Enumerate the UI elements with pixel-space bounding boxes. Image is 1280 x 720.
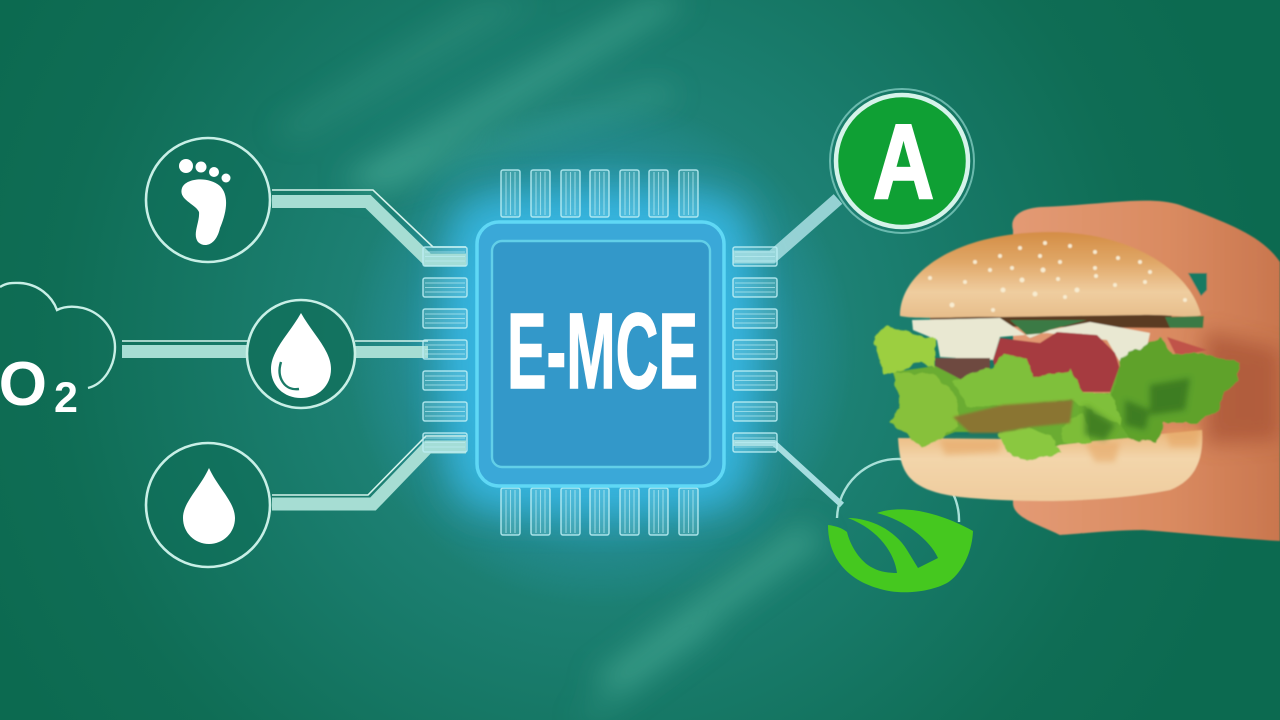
icon: CO2 cloud: 2 <box>54 374 78 422</box>
chip body <box>477 222 724 486</box>
hand <box>1012 201 1280 541</box>
shaded palm <box>1205 330 1280 445</box>
icon: green leaf with ring <box>828 459 973 592</box>
badge: grade A: A <box>873 103 934 221</box>
connector: chip to leaf <box>733 443 842 505</box>
badge: grade A <box>830 89 974 233</box>
burger in hand <box>874 201 1280 541</box>
sesame seeds <box>928 241 1187 312</box>
lettuce <box>874 325 1238 460</box>
green strip under bun <box>1010 316 1204 338</box>
lettuce underlay <box>893 340 1235 456</box>
light beams <box>270 0 825 720</box>
lettuce shading <box>1085 378 1190 440</box>
chip pins: bottom <box>501 488 698 535</box>
icon: footprint <box>146 138 270 262</box>
chip label: E-MCE <box>507 290 698 411</box>
shadow under bun <box>930 314 1172 328</box>
bottom bun <box>898 430 1202 501</box>
icon: drop <box>146 443 270 567</box>
tomato <box>993 332 1127 392</box>
connector: drop to chip <box>272 436 466 504</box>
chip pins: top <box>501 170 698 217</box>
icon: water drop with highlight <box>247 300 355 408</box>
icon: CO2 cloud <box>0 283 115 422</box>
connector: chip to grade A <box>733 199 838 257</box>
meat edge <box>935 358 990 382</box>
mayo <box>912 318 1150 367</box>
chip glow <box>345 98 855 608</box>
pickle <box>953 400 1073 433</box>
bun toasted patches <box>940 427 1200 462</box>
chip pins: left <box>423 247 467 452</box>
top bun <box>900 232 1201 318</box>
connector: footprint to chip <box>272 190 466 260</box>
connector: cloud to water drop to chip <box>122 341 428 352</box>
chip pins: right <box>733 247 777 452</box>
gap between fingers <box>1188 273 1207 296</box>
red reflection on palm <box>1167 337 1207 357</box>
